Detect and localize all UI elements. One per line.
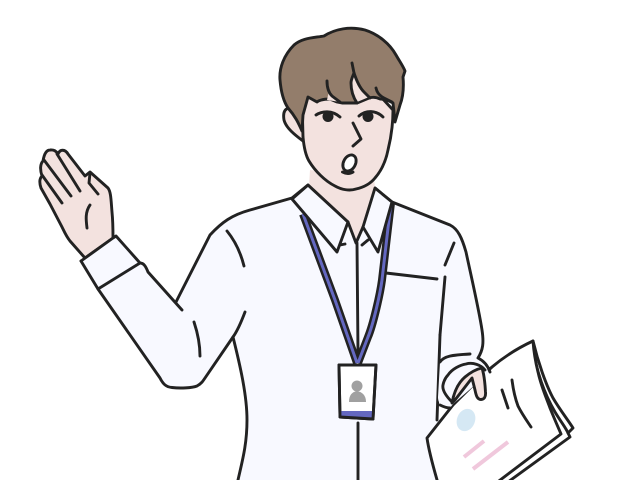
thumb [452,368,486,403]
forehead gaps in fringe [327,91,337,102]
pink text bars [464,441,484,457]
lanyard [303,203,391,363]
front page [427,341,561,480]
shirt torso and sleeve fill [81,185,483,480]
right eye [359,111,383,122]
back pages [495,341,573,480]
left eye [316,111,340,122]
torso left edge [233,337,247,480]
left shoulder outline [176,185,308,302]
shirt pocket [386,273,437,279]
head [280,28,405,190]
raised arm sleeve [81,231,245,388]
sleeve folds [227,231,244,266]
finger lines [42,175,62,203]
right shoulder and arm outline [375,188,483,358]
shirt collar [292,185,392,252]
shirt placket [357,243,358,352]
blue ellipse on page [453,406,479,434]
neck [309,170,375,243]
holding hand with shirt cuff [438,354,490,408]
face [302,85,393,190]
badge portrait icon [349,380,366,402]
hair [280,28,405,131]
palm crease [86,205,90,228]
raised hand [40,150,113,258]
cuff seam [98,263,140,289]
hair strands [327,81,340,102]
ear [284,108,306,141]
text lines on page [502,390,508,408]
mouth [340,153,359,173]
nose [353,123,361,146]
stack of papers [427,341,573,480]
id badge [339,365,376,419]
